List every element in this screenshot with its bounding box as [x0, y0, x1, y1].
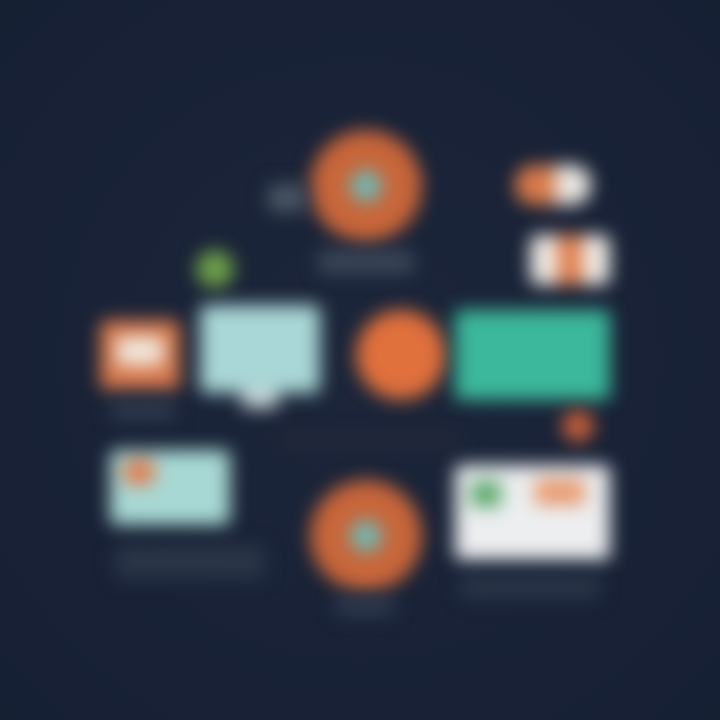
- card: right second: [530, 235, 610, 285]
- faint connector line: [280, 436, 460, 444]
- card: left orange-white: [100, 320, 180, 390]
- label: bottom left: [115, 545, 265, 579]
- icon: bottom orange circle: [310, 480, 422, 592]
- icon: teal center: [350, 170, 382, 202]
- small gray box: [268, 184, 306, 212]
- icon: small orange dot: [562, 410, 594, 442]
- card: bottom left: [110, 450, 230, 525]
- panel: teal rectangle: [455, 310, 610, 400]
- icon: teal center: [350, 520, 382, 552]
- pill: top right: [515, 165, 591, 205]
- icon: green dot: [196, 250, 234, 288]
- label: top circle: [318, 250, 414, 274]
- label: left card: [110, 400, 176, 420]
- icon: center orange circle: [356, 310, 446, 400]
- label: bottom right: [460, 575, 600, 599]
- icon: top orange circle: [310, 130, 422, 242]
- icon: monitor: [186, 290, 334, 422]
- label: bottom circle: [335, 596, 395, 616]
- card: bottom right: [455, 465, 610, 560]
